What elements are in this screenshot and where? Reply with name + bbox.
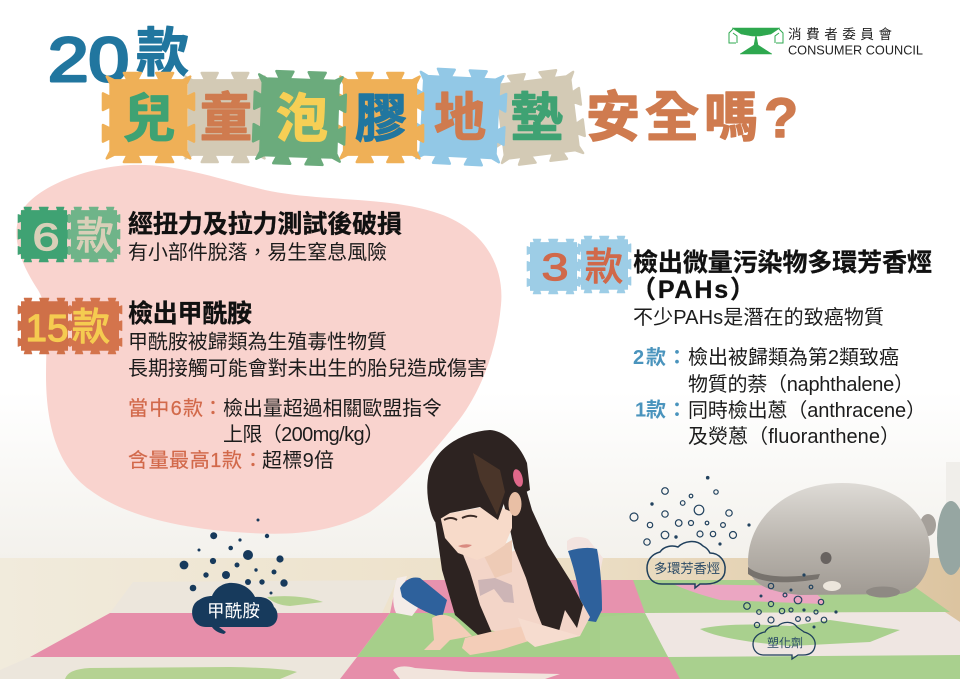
ear — [508, 492, 522, 516]
text block: 3款 finding: 檢出微量污染物多環芳香烴 — [633, 248, 932, 277]
whale mouth — [748, 567, 820, 582]
badge: 6款: 款 — [76, 216, 114, 258]
text block: 15款 finding — [128, 299, 487, 472]
teal toy at right — [937, 501, 960, 575]
text block: 3款 finding — [631, 248, 932, 448]
panel: pink blob background — [16, 165, 501, 534]
particles: 塑化劑 rings — [744, 573, 838, 628]
logo Chinese name: 消費者委員會 — [788, 27, 892, 42]
badge: 3款: 款 — [585, 247, 623, 289]
text block: 3款 finding: 不少PAHs是潛在的致癌物質 — [633, 306, 884, 329]
face — [440, 505, 512, 560]
cushion ear — [920, 514, 936, 536]
neck — [484, 540, 512, 578]
mouth — [458, 544, 472, 548]
tile 童: 童 — [200, 90, 252, 148]
tile 地: 地 — [434, 90, 486, 148]
tile 膠 — [337, 73, 423, 162]
right shoe — [567, 537, 603, 572]
whale fin — [866, 586, 900, 598]
text block: 15款 finding: 檢出量超過相關歐盟指令 — [223, 397, 442, 420]
text block: 15款 finding: ： — [203, 398, 223, 420]
tile 泡: 泡 — [276, 91, 328, 149]
text block: 15款 finding: 當中6款 — [128, 397, 203, 420]
text block: 3款 finding: （PAHs） — [631, 276, 755, 304]
hair parting highlight — [473, 453, 505, 515]
text block: 15款 finding: ： — [243, 450, 263, 472]
callout: 塑化劑 cloud: 塑化劑 — [767, 635, 803, 650]
hair clip — [511, 468, 525, 488]
badge: 6款: 6 — [32, 217, 60, 259]
title: 20款 — [48, 24, 189, 95]
badge: 15款: 款 — [72, 307, 110, 349]
badge: 15款 — [18, 298, 122, 354]
eyes — [444, 516, 477, 520]
text block: 3款 finding: ： — [667, 400, 687, 422]
left arm and hand — [424, 615, 472, 650]
title: 安全嗎?: ? — [764, 86, 798, 149]
foam play mat on the floor — [0, 580, 960, 679]
left leg jeans — [400, 577, 447, 618]
text block: 3款 finding: ： — [667, 347, 687, 369]
text block: 3款 finding: 物質的萘（naphthalene） — [688, 373, 914, 396]
text block: 3款 finding: 及熒蒽（fluoranthene） — [688, 425, 900, 448]
text block: 15款 finding: 上限（200mg/kg） — [223, 423, 384, 446]
text block: 6款 finding — [128, 210, 402, 264]
tile 兒: 兒 — [123, 91, 175, 149]
callout: 塑化劑 cloud — [753, 622, 815, 659]
badge: 6款 — [18, 207, 120, 262]
sleeve — [518, 618, 580, 647]
tile 兒 — [103, 73, 194, 162]
left shoe — [393, 576, 418, 616]
badge: 15款: 15 — [26, 308, 68, 350]
whale cheek — [823, 581, 841, 591]
badge: 3款: 3 — [542, 247, 568, 289]
callout: 多環芳香烴 cloud — [647, 542, 725, 588]
text block: 3款 finding: 檢出被歸類為第2類致癌 — [688, 346, 899, 369]
tile 塾 — [488, 68, 587, 167]
text block: 6款 finding: 經扭力及拉力測試後破損 — [128, 210, 402, 238]
background: wooden floor — [0, 558, 960, 679]
text block: 3款 finding: 1款 — [635, 398, 666, 422]
tile 地 — [412, 68, 507, 166]
left hair strand — [428, 490, 492, 635]
illustration: whale cushion — [748, 483, 960, 598]
tile 塾: 墊 — [511, 90, 563, 148]
bow — [478, 578, 514, 603]
text block: 3款 finding: 同時檢出蒽（anthracene） — [688, 399, 926, 422]
whale eye — [820, 552, 832, 564]
callout: 甲酰胺 cloud: 甲酰胺 — [207, 601, 260, 621]
text block: 15款 finding: 含量最高1款 — [128, 449, 242, 472]
text block: 15款 finding: 甲酰胺被歸類為生殖毒性物質 — [128, 330, 387, 354]
title: 20款: 款 — [136, 24, 189, 83]
text block: 3款 finding: 2款 — [633, 346, 666, 369]
particles: 甲酰胺 dots — [180, 518, 288, 594]
text block: 6款 finding: 有小部件脫落，易生窒息風險 — [128, 241, 387, 264]
pink top — [459, 545, 590, 645]
hair top with bangs — [427, 430, 530, 522]
whale body — [748, 483, 930, 595]
icon: green scales — [729, 28, 783, 54]
wall panel at right — [946, 462, 960, 558]
particles: 多環芳香烴 rings — [630, 476, 751, 546]
logo English name: CONSUMER COUNCIL — [788, 42, 923, 58]
title: puzzle tiles 兒童泡膠地墊 — [103, 68, 587, 167]
title: 20款: 20 — [48, 26, 129, 95]
callout: 甲酰胺 cloud — [192, 583, 278, 634]
tile 童 — [182, 73, 268, 162]
right arm and hand — [462, 626, 532, 655]
text block: 15款 finding: 長期接觸可能會對未出生的胎兒造成傷害 — [128, 357, 487, 380]
logo: Consumer Council — [729, 27, 923, 58]
text block: 15款 finding: 超標9倍 — [262, 449, 334, 472]
text block: 15款 finding: 檢出甲酰胺 — [128, 299, 252, 328]
tile 膠: 膠 — [355, 91, 407, 149]
right leg jeans — [568, 548, 602, 622]
callout: 多環芳香烴 cloud: 多環芳香烴 — [654, 561, 720, 576]
tile 泡 — [252, 70, 347, 166]
illustration: girl on the mat — [393, 430, 603, 655]
badge: 3款 — [527, 236, 631, 294]
title: 安全嗎?: 安全嗎 — [586, 88, 758, 148]
right hair strand — [500, 468, 583, 642]
